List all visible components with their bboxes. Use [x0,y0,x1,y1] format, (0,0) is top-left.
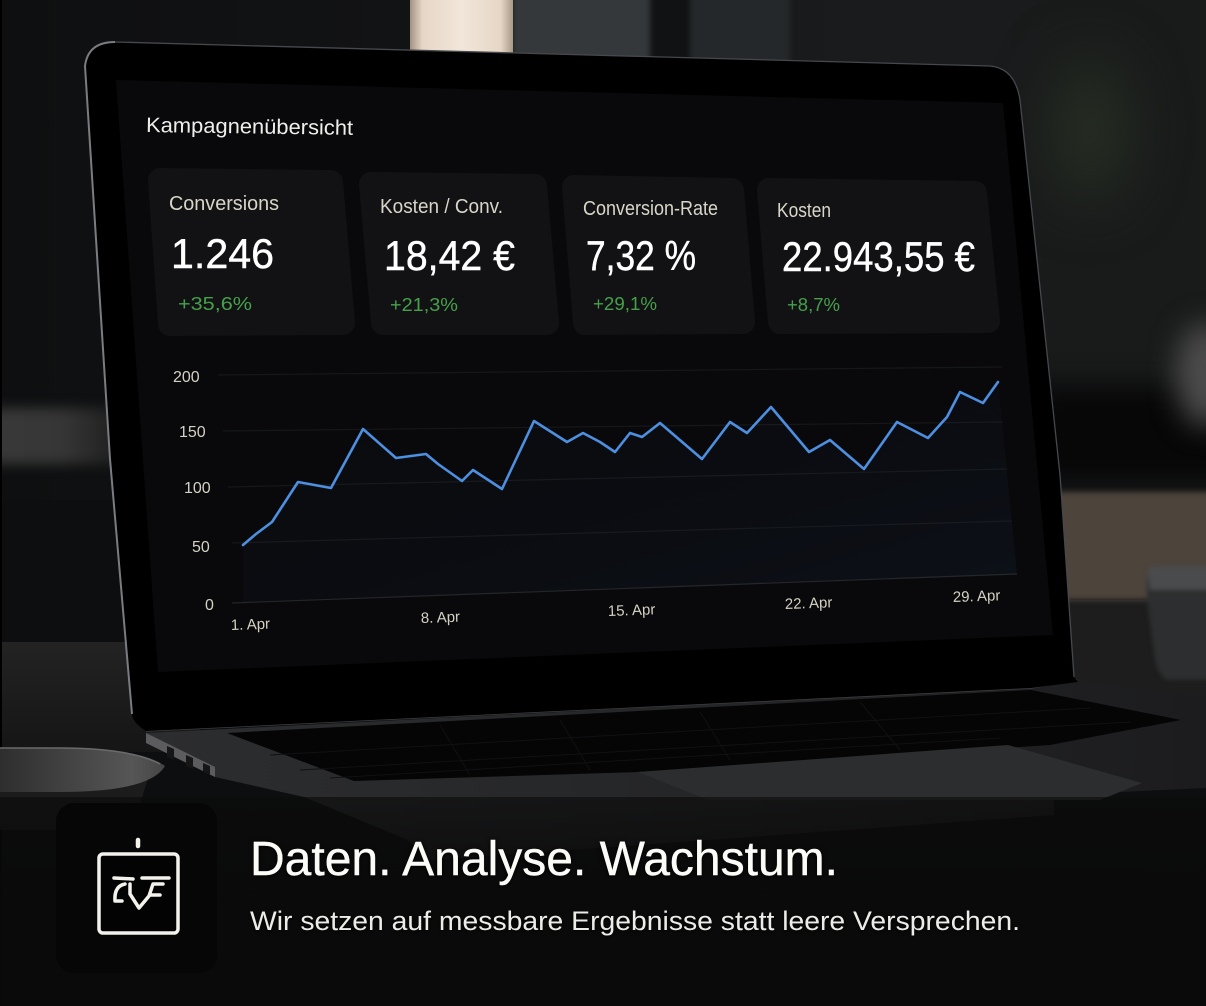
bottom overlay band [0,797,1206,1006]
icon: dashboard analysis board [99,840,178,933]
subheading: Wir setzen auf messbare Ergebnisse statt leere Versprechen. [250,906,1020,936]
touchpad [638,745,1142,800]
y axis labels: 150 [179,424,206,441]
y axis labels: 200 [173,369,200,386]
hinge [146,680,1077,731]
KPI card: Kosten / Conv.: +21,3% [390,295,458,315]
coffee cup right [1147,566,1206,680]
headline: Daten. Analyse. Wachstum. [250,833,838,886]
KPI card: Conversion-Rate: Conversion-Rate [583,198,718,220]
area under line [243,382,1017,602]
light beam [410,0,513,60]
KPI card: Conversions: +35,6% [178,294,252,314]
KPI card: Kosten: Kosten [777,200,831,222]
KPI card: Conversion-Rate: +29,1% [593,294,657,314]
y axis labels: 50 [192,539,210,556]
y axis labels [173,369,214,614]
KPI card: Kosten / Conv.: Kosten / Conv. [380,196,503,218]
base deck [146,680,1206,860]
dashboard title: Kampagnenübersicht [146,114,353,140]
y axis labels: 0 [205,597,214,614]
data line [243,382,998,545]
x axis labels [231,587,1001,634]
KPI card: Kosten / Conv. [371,184,547,323]
x axis labels: 29. Apr [953,587,1001,606]
y axis labels: 100 [184,480,211,497]
screen [116,80,1053,672]
x axis labels: 8. Apr [421,609,460,627]
KPI card: Conversions [160,180,343,324]
x axis labels: 1. Apr [231,616,270,634]
laptop base [146,680,1206,860]
KPI card: Conversions: 1.246 [171,230,274,277]
KPI card: Conversions: Conversions [169,193,279,215]
coffee cup left [0,748,165,830]
KPI card: Kosten: +8,7% [787,295,840,315]
side ports [146,733,215,777]
x axis labels: 15. Apr [608,601,656,620]
KPI card: Conversion-Rate [574,187,743,323]
chart grid [218,367,1017,603]
x axis labels: 22. Apr [785,594,833,613]
KPI card: Kosten: 22.943,55 € [782,233,975,280]
KPI card: Kosten [769,190,988,322]
KPI card: Conversion-Rate: 7,32 % [586,232,696,279]
keyboard [227,690,1181,781]
laptop lid [85,42,1078,731]
KPI card: Kosten / Conv.: 18,42 € [384,232,515,279]
icon tile [56,803,217,973]
line chart: conversions [173,367,1017,634]
